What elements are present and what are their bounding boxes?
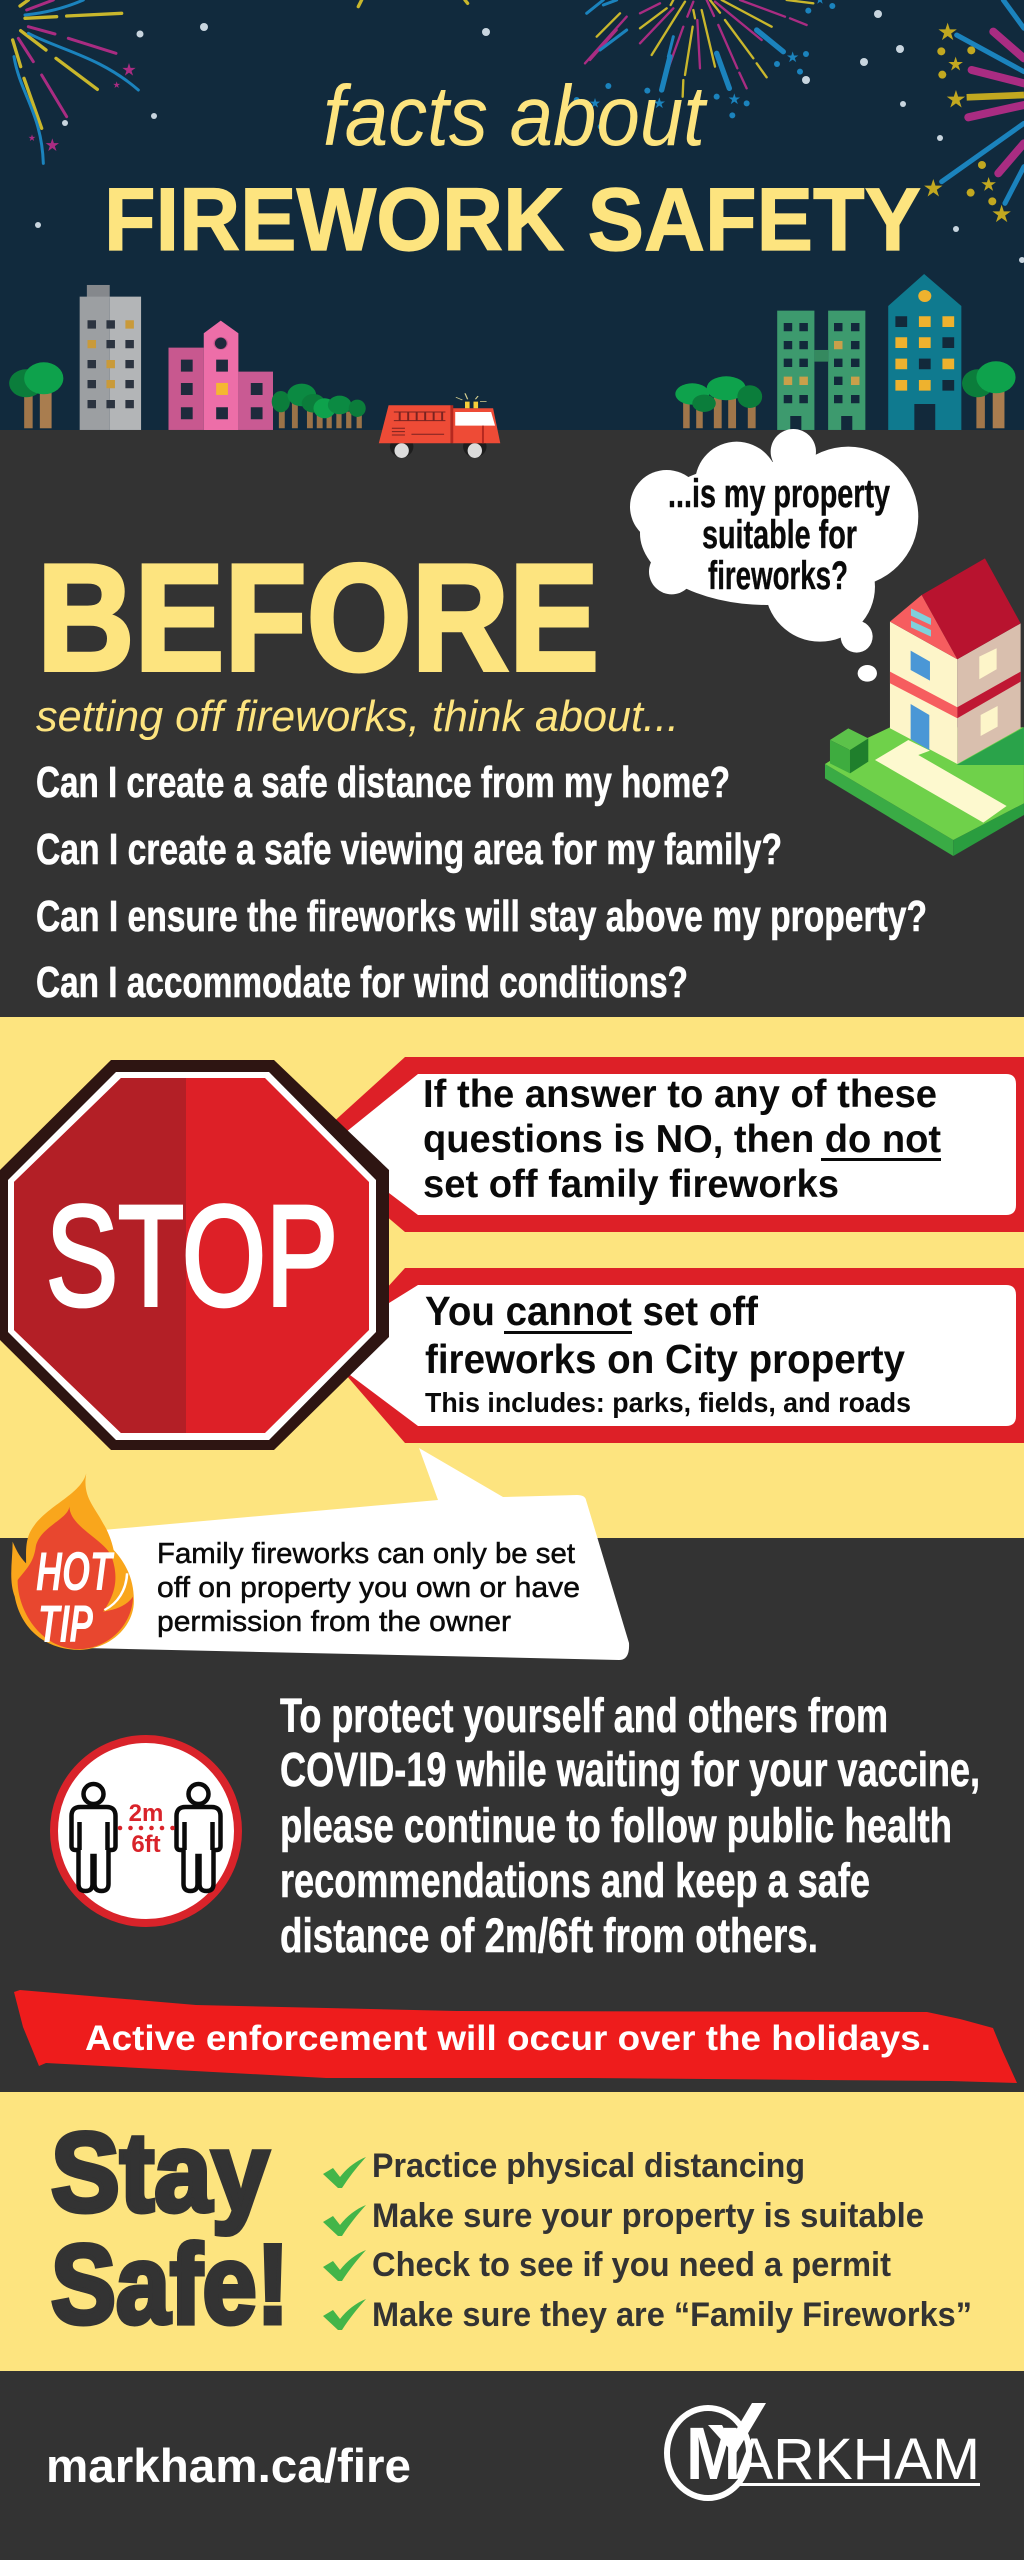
callout: hot tip bubble: Family fireworks can only be set [157,1538,575,1570]
heading: BEFORE: BEFORE [37,533,599,703]
text: covid message [280,1690,980,1963]
callout: answer is no: set off family fireworks [423,1163,839,1206]
icon: stop sign: STOP [46,1177,338,1336]
building: teal tower [888,274,961,430]
callout: hot tip bubble: permission from the owner [157,1606,511,1638]
question list: Can I create a safe viewing area for my family? [36,825,782,874]
checklist: Make sure they are “Family Fireworks” [372,2296,972,2334]
callout: answer is no: If the answer to any of these [423,1073,937,1116]
title: firework safety: FIREWORK SAFETY [104,169,921,269]
panel: yellow stop band [0,1017,1024,1538]
icon: physical distancing: 6ft [131,1831,161,1858]
heading: stay safe [51,2110,289,2347]
icon: physical distancing [54,1739,238,1923]
callout: hot tip bubble [84,1448,629,1660]
house body [890,558,1021,764]
trees: right grove [675,376,762,428]
icon: fire truck [379,393,500,458]
icon: hot tip flame: TIP [38,1595,93,1654]
text: covid message: distance of 2m/6ft from others. [280,1910,818,1963]
icon: hot tip flame [11,1473,134,1654]
fireworks: top left burst [13,0,468,163]
question list: Can I accommodate for wind conditions? [36,958,688,1007]
callout: answer is no [330,1057,1024,1232]
callout: city property: You cannot set off [425,1288,758,1334]
trees: far right pair [962,361,1016,428]
banner: active enforcement: Active enforcement will occur over the holidays. [85,2019,931,2058]
question list [36,758,927,1007]
callout: city property [333,1268,1024,1443]
checklist: Practice physical distancing [372,2147,805,2185]
thought bubble [630,429,918,682]
building: green twin towers [777,311,865,430]
stars: white dots in the sky [35,10,1024,263]
skyline illustration [9,274,1016,458]
panel: stay safe band [0,2092,1024,2371]
callout: city property: fireworks on City property [425,1336,905,1382]
callout: answer is no: questions is NO, then do not [423,1118,941,1161]
lawn base [825,727,1024,856]
building: grey tower [80,285,141,430]
question list: Can I create a safe distance from my home? [36,758,730,807]
icon: physical distancing: 2m [129,1800,163,1827]
banner: active enforcement [14,1990,1017,2083]
building: pink house [168,321,273,430]
fireworks: right burst [924,0,1024,222]
bubble text [668,472,891,598]
heading: stay safe: Safe! [51,2222,289,2347]
bubble text: ...is my property [668,472,891,516]
subheading: think about: setting off fireworks, think about... [36,692,679,741]
icon: stop sign [0,1060,389,1450]
logo: Markham: ARKHAM [735,2427,980,2492]
fireworks: top centre burst [574,0,835,130]
icon: hot tip flame: HOT [36,1540,115,1602]
logo: Markham: M [686,2412,741,2495]
text: website: markham.ca/fire [46,2439,411,2492]
logo: Markham [667,2403,980,2498]
checklist [323,2147,972,2334]
trees: middle grove [272,384,366,428]
callout: city property: This includes: parks, fields, and roads [425,1387,911,1418]
callout: hot tip bubble: off on property you own or have [157,1572,580,1604]
checklist: Make sure your property is suitable [372,2197,924,2235]
icon: isometric house on lawn [825,558,1024,856]
heading: stay safe: Stay [51,2110,269,2235]
panel: night sky header [0,0,1024,430]
checklist: Check to see if you need a permit [372,2246,891,2284]
title: facts about: facts about [323,69,708,164]
trees: left pair [9,362,63,428]
bubble text: fireworks? [708,554,848,598]
bubble text: suitable for [702,513,857,557]
